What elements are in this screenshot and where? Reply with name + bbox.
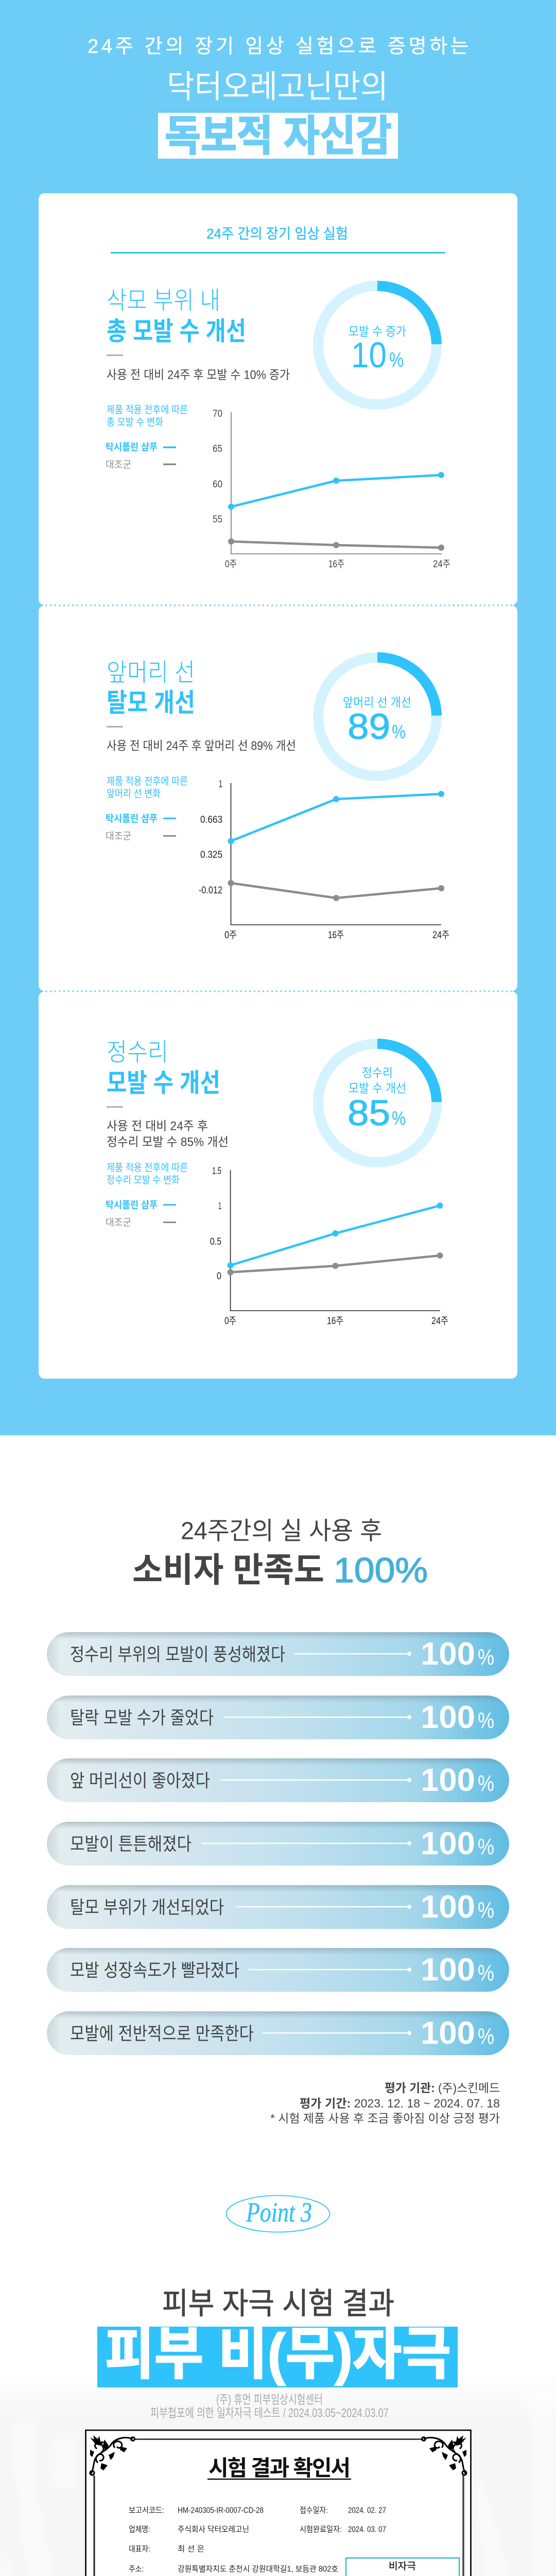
donut chart: hair count 10%: 모발 수 증가 — [349, 325, 406, 339]
badge: Point 3 — [227, 2196, 329, 2232]
panel: white results card — [39, 193, 517, 1379]
panel: total hair count — [106, 286, 450, 570]
certificate title: 시험 결과 확인서 — [208, 2456, 351, 2480]
icon: corner ornament right — [422, 2435, 466, 2475]
heading: consumer satisfaction: 소비자 만족도 — [132, 1551, 324, 1589]
line chart: hairline: 0주 — [224, 930, 237, 941]
donut chart: crown 85% — [318, 1044, 437, 1162]
icon: corner ornament left — [90, 2435, 135, 2475]
bar: growth speed 100%: 100 — [421, 1952, 475, 1988]
certificate fields: 대표자: — [129, 2545, 150, 2554]
donut chart: hairline 89%: 89 — [348, 706, 390, 747]
text: test lab and date — [150, 2393, 389, 2420]
header: brand title: 닥터오레고닌만의 — [167, 69, 388, 105]
header: highlighted title: 독보적 자신감 — [165, 113, 392, 160]
bar: hair loss area 100%: 100 — [421, 1889, 475, 1925]
legend: crown — [106, 1162, 188, 1228]
line chart: hairline: -0.012 — [199, 885, 222, 896]
heading: consumer satisfaction — [132, 1517, 428, 1590]
bar: stronger hair 100% — [47, 1822, 509, 1866]
bar: overall satisfaction 100% — [47, 2011, 509, 2055]
card heading — [111, 226, 445, 253]
heading: consumer satisfaction: 24주간의 실 사용 후 — [181, 1517, 382, 1545]
bar: crown volume 100%: % — [478, 1645, 494, 1670]
panel: certificate — [85, 2430, 471, 2576]
line chart: crown: 16주 — [327, 1316, 343, 1327]
heading: total hair count — [107, 287, 246, 356]
certificate fields: 2024. 02. 27 — [348, 2506, 386, 2515]
line chart: hairline: 1 — [219, 779, 222, 790]
background: lab glassware panel — [0, 2370, 556, 2576]
bar: hairline 100% — [47, 1758, 509, 1802]
line chart: hairline: 0.325 — [200, 850, 222, 860]
legend: total hair count: 탁시폴린 샴푸 — [106, 442, 158, 453]
donut chart: crown 85%: % — [392, 1108, 406, 1129]
bar: hair loss area 100%: % — [478, 1897, 494, 1923]
legend: crown: 탁시폴린 샴푸 — [106, 1199, 158, 1211]
line chart: total hair count: 16주 — [328, 559, 344, 570]
legend: crown: 제품 적용 전후에 따른 — [107, 1162, 188, 1174]
bar: overall satisfaction 100%: 모발에 전반적으로 만족한다 — [70, 2024, 254, 2044]
text: evaluation notes: 평가 기관: (주)스킨메드 — [385, 2081, 500, 2094]
bar: hair loss count 100% — [47, 1696, 509, 1739]
bar: growth speed 100%: 모발 성장속도가 빨라졌다 — [70, 1961, 239, 1981]
bar: hair loss count 100%: 탈락 모발 수가 줄었다 — [70, 1708, 214, 1728]
badge: Point 3: Point 3 — [246, 2197, 312, 2228]
legend: total hair count: 총 모발 수 변화 — [107, 416, 163, 428]
donut chart: hairline 89% — [318, 657, 437, 776]
donut chart: crown 85%: 정수리 — [362, 1066, 393, 1080]
line chart: hairline — [199, 779, 449, 941]
bar: hair loss count 100%: 100 — [421, 1700, 475, 1735]
certificate fields: 시험완료일자: — [300, 2525, 342, 2534]
callout: excellent verdict: 비자극 — [389, 2561, 416, 2572]
line chart: total hair count — [213, 409, 450, 570]
bar: hairline 100%: % — [478, 1771, 494, 1796]
line chart: hairline: 0.663 — [200, 815, 222, 825]
line chart: total hair count: 24주 — [433, 559, 450, 570]
heading: hairline improvement — [107, 659, 195, 727]
line chart: total hair count: 65 — [213, 444, 222, 454]
line chart: hairline: 24주 — [432, 930, 449, 941]
text: crown description: 정수리 모발 수 85% 개선 — [107, 1136, 229, 1149]
line chart: total hair count: 0주 — [225, 559, 237, 570]
header: eyebrow text: 24주 간의 장기 임상 실험으로 증명하는 — [88, 36, 468, 58]
text: hairline description: 사용 전 대비 24주 후 앞머리 선 89% 개선 — [107, 739, 296, 753]
bar: crown volume 100% — [47, 1632, 509, 1676]
line chart: crown — [210, 1166, 448, 1327]
text: evaluation notes — [270, 2081, 500, 2125]
heading: hairline improvement: 탈모 개선 — [107, 688, 195, 717]
text: evaluation notes: * 시험 제품 사용 후 조금 좋아짐 이상 긍정 평가 — [270, 2111, 500, 2125]
panel: blue clinical trial section — [0, 0, 556, 1435]
legend: hairline — [106, 775, 188, 842]
certificate fields: 주소: — [129, 2565, 144, 2574]
donut chart: hair count 10%: % — [389, 349, 404, 371]
heading: hairline improvement: 앞머리 선 — [107, 659, 195, 686]
legend: hairline: 제품 적용 전후에 따른 — [107, 775, 188, 787]
legend: total hair count — [106, 404, 188, 470]
panel: hairline improvement — [106, 657, 449, 941]
heading: consumer satisfaction: 100% — [334, 1551, 428, 1590]
heading: crown hair count: 모발 수 개선 — [107, 1069, 220, 1097]
donut chart: crown 85%: 85 — [348, 1093, 390, 1133]
line chart: crown: 0 — [217, 1271, 221, 1282]
bar: hair loss count 100%: % — [478, 1708, 494, 1733]
line chart: hairline: 16주 — [328, 930, 344, 941]
certificate fields: 2024. 03. 07 — [348, 2526, 386, 2534]
text: crown description — [107, 1120, 229, 1149]
line chart: total hair count: 60 — [213, 479, 222, 490]
panel: crown hair count — [106, 1039, 448, 1327]
certificate fields: 업체명: — [129, 2525, 150, 2534]
banner: non-irritating skin: 피부 비(무)자극 — [105, 2323, 451, 2386]
certificate fields: 접수일자: — [300, 2506, 328, 2515]
bar: hairline 100%: 100 — [421, 1762, 475, 1798]
legend: hairline: 탁시폴린 샴푸 — [106, 813, 158, 824]
bar: crown volume 100%: 정수리 부위의 모발이 풍성해졌다 — [70, 1645, 285, 1665]
text: crown description: 사용 전 대비 24주 후 — [107, 1120, 208, 1133]
bar: overall satisfaction 100%: % — [478, 2024, 494, 2049]
donut chart: hairline 89%: % — [392, 721, 406, 743]
legend: total hair count: 제품 적용 전후에 따른 — [107, 404, 188, 416]
bar: growth speed 100%: % — [478, 1960, 494, 1986]
legend: hairline: 앞머리 선 변화 — [107, 788, 161, 800]
line chart: crown: 1.5 — [212, 1166, 221, 1177]
certificate fields: 보고서코드: — [129, 2506, 164, 2515]
card heading: 24주 간의 장기 임상 실험 — [206, 226, 348, 242]
heading: crown hair count — [107, 1039, 220, 1108]
legend: total hair count: 대조군 — [106, 459, 131, 470]
callout: excellent verdict — [346, 2558, 459, 2576]
donut chart: hairline 89%: 앞머리 선 개선 — [343, 696, 411, 710]
bar: crown volume 100%: 100 — [421, 1636, 475, 1672]
heading: total hair count: 총 모발 수 개선 — [107, 317, 246, 346]
heading: skin irritation test: 피부 자극 시험 결과 — [162, 2287, 394, 2320]
line chart: crown: 0주 — [224, 1316, 236, 1327]
text: evaluation notes: 평가 기간: 2023. 12. 18 ~ 2024. 07. 18 — [300, 2096, 500, 2110]
line chart: total hair count: 55 — [213, 514, 222, 525]
certificate fields: 강원특별자치도 춘천시 강원대학길1, 보듬관 802호 — [178, 2565, 338, 2574]
heading: crown hair count: 정수리 — [107, 1039, 168, 1066]
text: test lab and date: 피부첩포에 의한 일차자극 테스트 / 2024.03.05~2024.03.07 — [150, 2406, 389, 2420]
legend: crown: 정수리 모발 수 변화 — [107, 1174, 180, 1186]
bar: hair loss area 100% — [47, 1885, 509, 1929]
bar: stronger hair 100%: 모발이 튼튼해졌다 — [70, 1835, 192, 1855]
certificate fields: 최 선 은 — [178, 2545, 204, 2554]
donut chart: crown 85%: 모발 수 개선 — [349, 1082, 406, 1096]
bar: stronger hair 100%: % — [478, 1834, 494, 1859]
bar: growth speed 100% — [47, 1948, 509, 1992]
text: total hair count description: 사용 전 대비 24주 후 모발 수 10% 증가 — [107, 368, 290, 382]
donut chart: hair count 10%: 10 — [351, 335, 387, 375]
legend: hairline: 대조군 — [106, 831, 131, 842]
legend: crown: 대조군 — [106, 1217, 131, 1228]
certificate fields — [129, 2506, 386, 2576]
bar: hair loss area 100%: 탈모 부위가 개선되었다 — [70, 1898, 224, 1918]
bar: overall satisfaction 100%: 100 — [421, 2015, 475, 2051]
bar: stronger hair 100%: 100 — [421, 1826, 475, 1861]
certificate fields: HM-240305-IR-0007-CD-28 — [178, 2506, 264, 2515]
line chart: crown: 0.5 — [210, 1236, 221, 1247]
donut chart: hair count 10% — [318, 286, 437, 404]
text: test lab and date: (주) 휴먼 피부임상시험센터 — [216, 2393, 323, 2407]
panel: satisfaction bars — [47, 1632, 509, 2055]
heading: total hair count: 삭모 부위 내 — [107, 287, 220, 314]
line chart: crown: 1 — [218, 1201, 221, 1212]
line chart: total hair count: 70 — [213, 409, 222, 419]
line chart: crown: 24주 — [431, 1316, 448, 1327]
bar: hairline 100%: 앞 머리선이 좋아졌다 — [70, 1771, 210, 1791]
certificate fields: 주식회사 닥터오레고닌 — [178, 2525, 249, 2534]
